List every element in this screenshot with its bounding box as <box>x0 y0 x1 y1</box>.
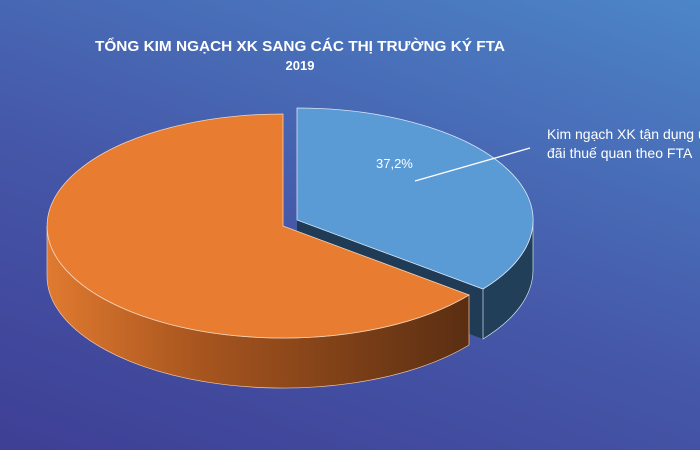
title <box>95 37 505 73</box>
pie slice: blue 37.2% <box>297 108 533 339</box>
legend label: đãi thuế quan theo FTA <box>547 145 693 161</box>
legend label <box>547 126 700 161</box>
title: 2019 <box>286 58 314 73</box>
title: TỔNG KIM NGẠCH XK SANG CÁC THỊ TRƯỜNG KÝ FTA <box>95 37 505 55</box>
data label: 37,2% <box>376 156 413 171</box>
pie slice: orange 62.8% <box>47 114 469 388</box>
leader line <box>415 148 530 181</box>
